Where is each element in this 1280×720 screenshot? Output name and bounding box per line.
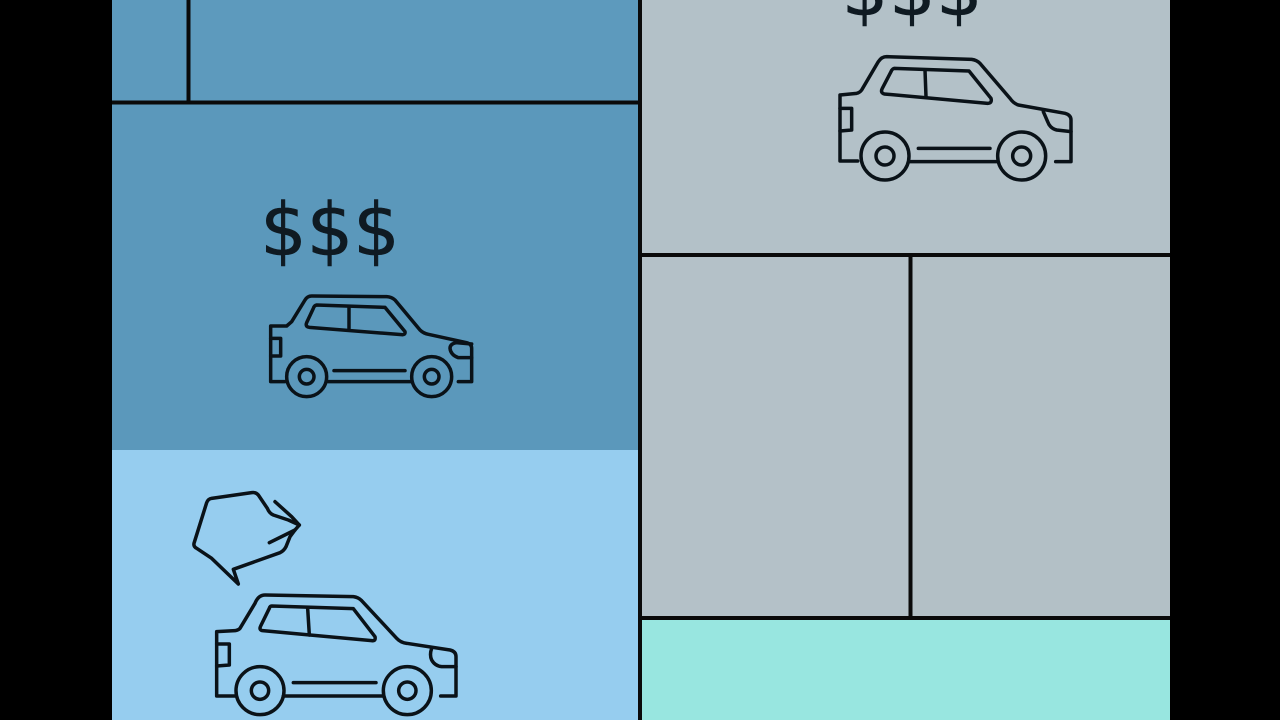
icon: hand-drawn speech tag (194, 493, 299, 584)
icon: dollar signs, middle panel (260, 188, 400, 273)
icon: dollar signs, grey panel (842, 0, 983, 33)
panel: grey top (642, 0, 1170, 253)
panel: light blue bottom (112, 450, 638, 720)
icon: dollar signs, middle panel: $ (260, 188, 307, 273)
panel: grey lower right (912, 257, 1170, 616)
panel: dark blue middle (112, 104, 638, 450)
icon: car, grey panel (840, 57, 1071, 180)
icon: car, light blue panel (217, 595, 456, 715)
icon: dollar signs, middle panel: $ (307, 188, 353, 273)
panel: mint bottom (642, 620, 1170, 720)
icon: car, middle panel (271, 296, 472, 397)
icon: dollar signs, middle panel: $ (353, 188, 400, 273)
panel: grey lower left (642, 257, 909, 616)
panel: dark blue top (112, 0, 638, 102)
